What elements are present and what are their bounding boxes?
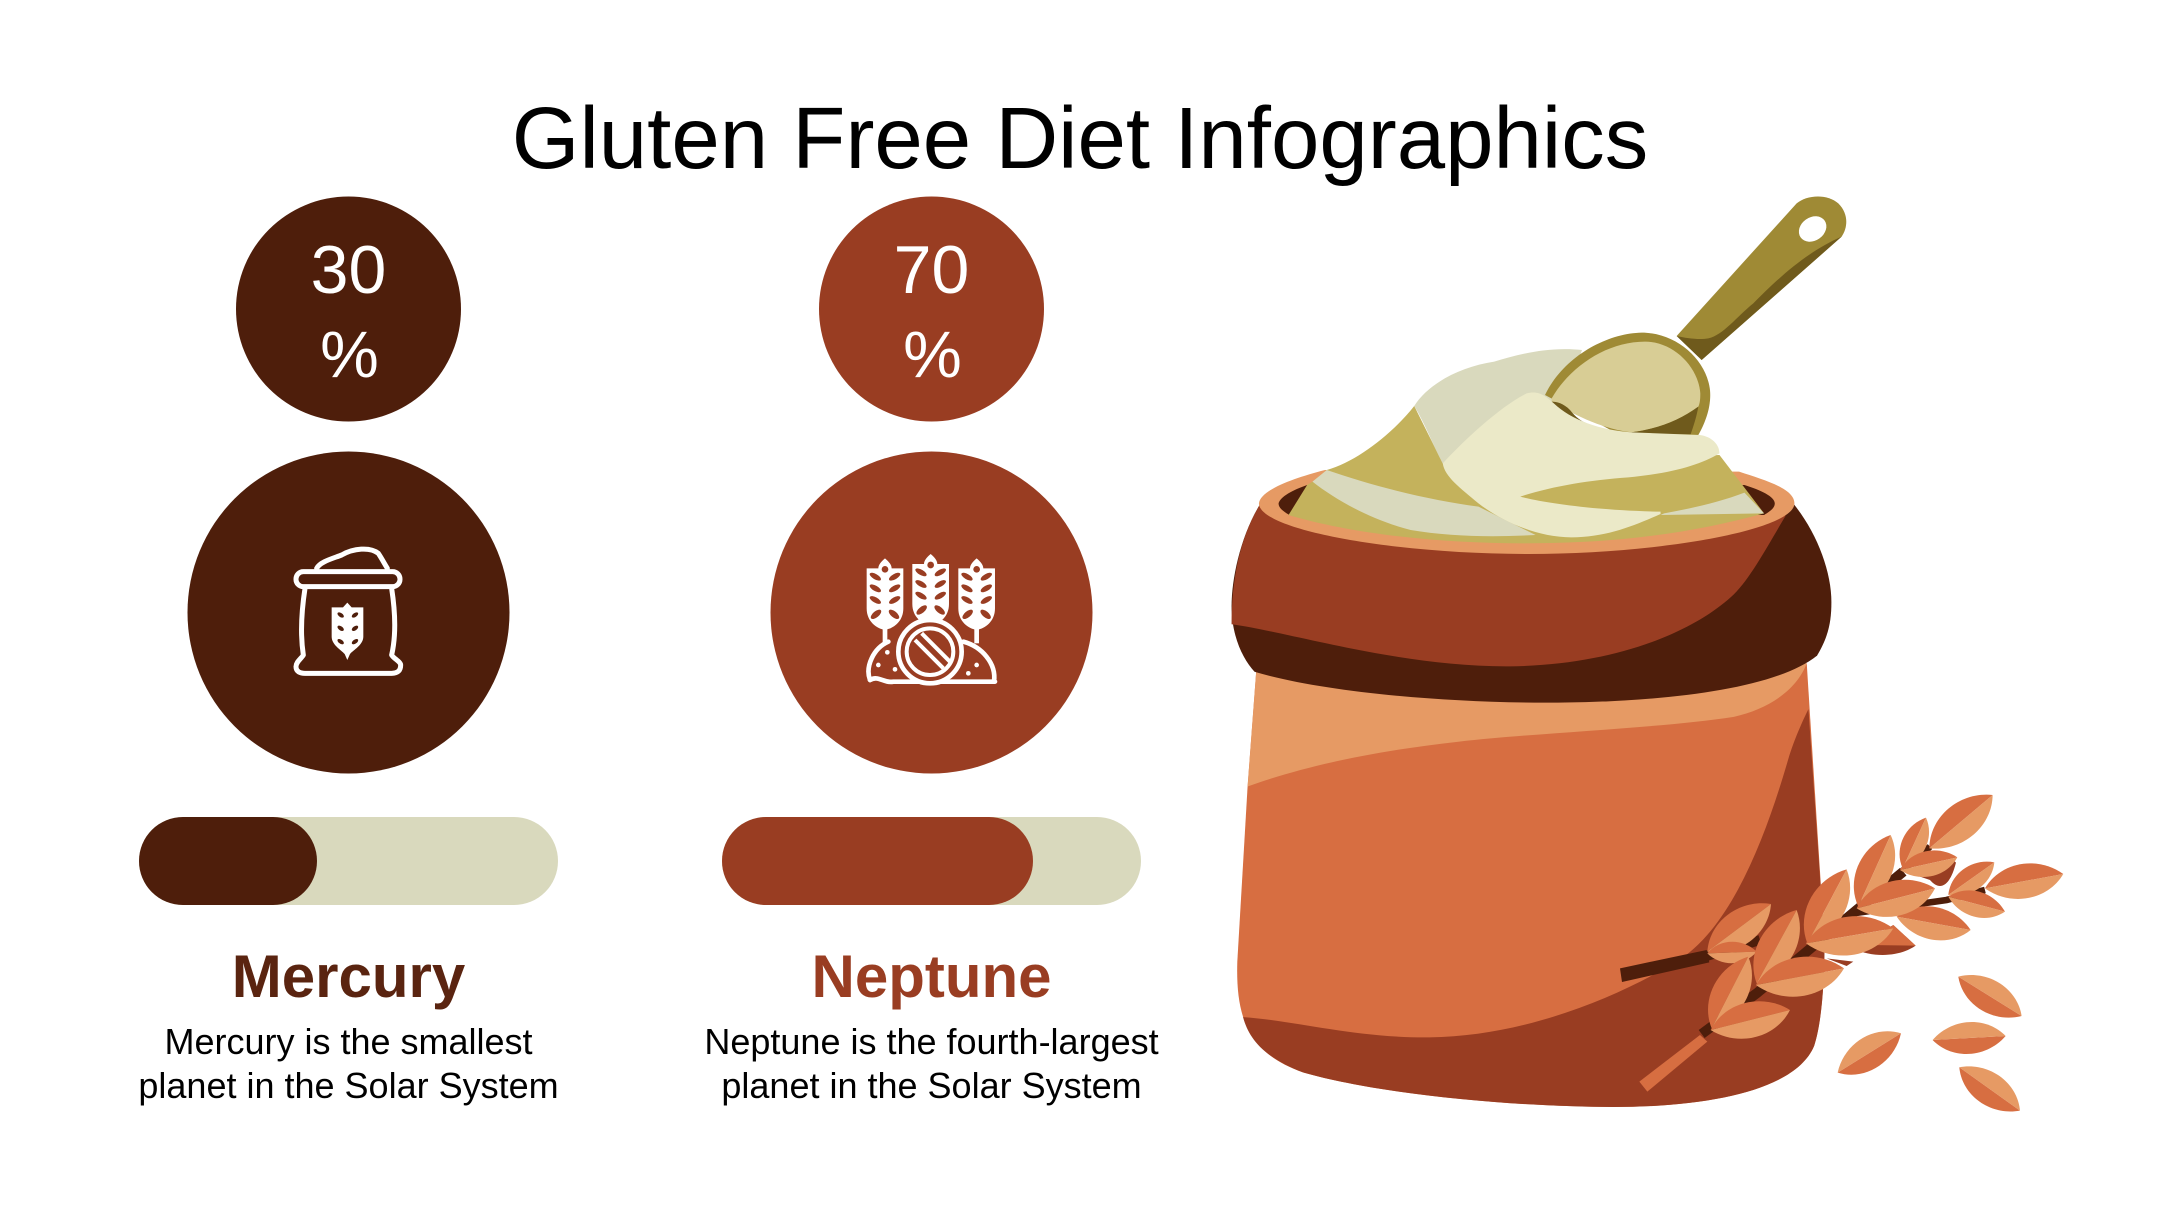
panel: Neptune	[704, 196, 1159, 1106]
title: Gluten Free Diet Infographics	[512, 90, 1648, 187]
description: Neptune: planet in the Solar System	[721, 1065, 1142, 1106]
percent badge: 30%: 30	[311, 232, 386, 308]
icon circle: flour sack	[188, 452, 510, 774]
scoop	[1545, 196, 1846, 435]
icon circle: no wheat	[770, 452, 1092, 774]
percent badge: 70%: %	[903, 317, 962, 391]
flour front fold	[1443, 392, 1719, 537]
illustration: flour sack with scoop and wheat	[1232, 196, 2066, 1124]
sack body	[1232, 505, 1831, 1107]
heading: Neptune: Neptune	[812, 943, 1052, 1010]
heading: Mercury: Mercury	[232, 943, 466, 1010]
description: Mercury: planet in the Solar System	[138, 1065, 559, 1106]
percent badge: 30%: %	[320, 317, 379, 391]
percent badge: 30%	[236, 196, 461, 422]
percent badge: 70%	[819, 196, 1044, 422]
loose grains	[1829, 963, 2030, 1124]
percent badge: 70%: 70	[894, 232, 969, 308]
progress bar: 30%	[139, 817, 558, 905]
sack rim and flour	[1259, 349, 1794, 554]
progress bar: 70%	[722, 817, 1141, 905]
panel: Mercury	[138, 196, 559, 1106]
description: Mercury: Mercury is the smallest	[164, 1021, 533, 1062]
wheat stalk	[1620, 781, 2066, 1092]
description: Neptune: Neptune is the fourth-largest	[704, 1021, 1159, 1062]
